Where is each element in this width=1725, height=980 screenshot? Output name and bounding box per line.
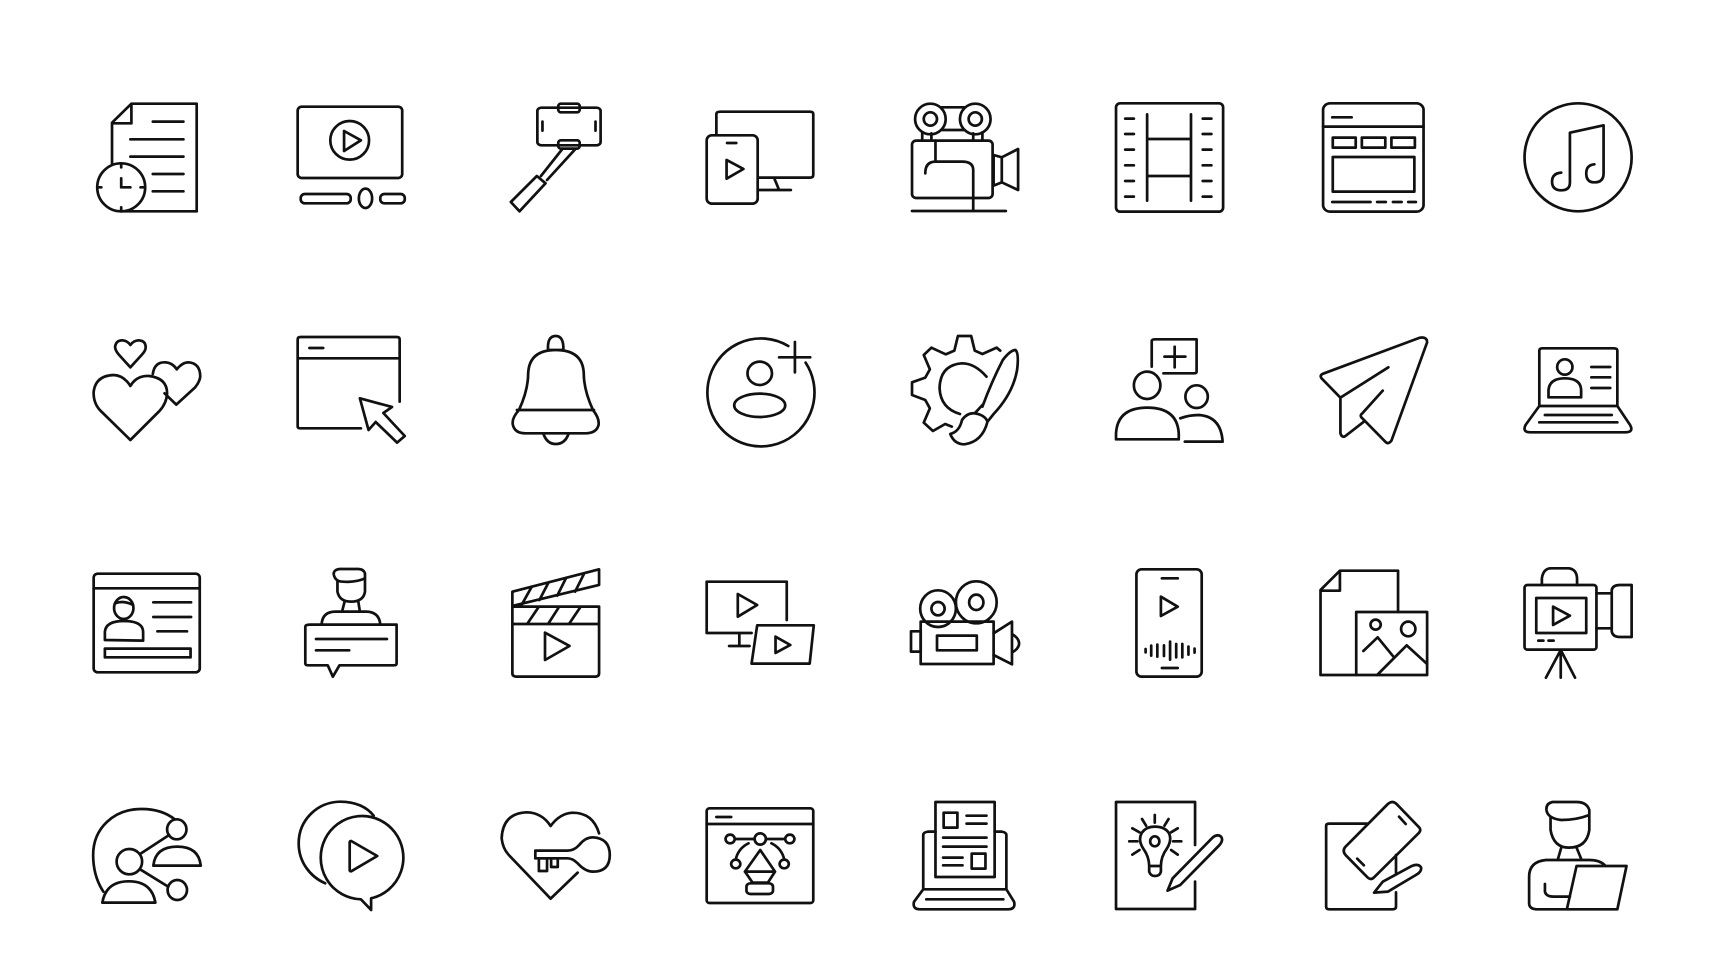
icon: music note (1525, 103, 1632, 211)
icon: vector pen window (707, 808, 813, 903)
icon: monitor and tablet video (707, 582, 814, 664)
icon: bell (513, 336, 599, 444)
icon: film strip (1116, 103, 1223, 212)
icon: monitor and phone (707, 112, 813, 204)
icon: video camera on tripod (1525, 568, 1632, 678)
row 3 right (911, 568, 1632, 678)
icon: person with speech bubble (305, 569, 397, 677)
row 2 right (912, 336, 1631, 444)
icon: gear and paintbrush (912, 336, 1018, 444)
icon: heart with key (502, 812, 610, 899)
icon: idea page with pen (1116, 802, 1222, 909)
icon: document with clock (97, 104, 197, 211)
icon: person with laptop (1529, 802, 1627, 909)
icon: video player (298, 107, 405, 208)
row 1 right (912, 103, 1632, 212)
icon: people with plus (1116, 339, 1223, 442)
row 4 left (93, 802, 813, 910)
icon: share people (93, 809, 201, 903)
icon: file with picture (1321, 571, 1427, 675)
icon: profile card (94, 574, 200, 672)
icon: web page layout (1323, 103, 1424, 212)
icon: phone, tablet and stylus (1326, 802, 1421, 909)
icon: paper plane (1321, 338, 1427, 443)
icon: film camera on stand (912, 104, 1018, 211)
icon: add user (707, 338, 814, 446)
icon: laptop with profile (1525, 348, 1631, 432)
row 2 left (94, 336, 814, 446)
icon: laptop with article (914, 802, 1014, 909)
row 3 left (94, 569, 814, 677)
icon: film projector (911, 581, 1019, 664)
row 1 left (97, 104, 813, 211)
icon: clapperboard (512, 569, 599, 677)
icon: video chat bubbles (299, 802, 403, 910)
icon: selfie stick (511, 104, 601, 211)
icon: hearts (94, 340, 200, 440)
row 4 right (914, 802, 1627, 909)
icon: browser window with cursor (298, 337, 405, 443)
icon: phone with audio wave (1136, 569, 1202, 677)
